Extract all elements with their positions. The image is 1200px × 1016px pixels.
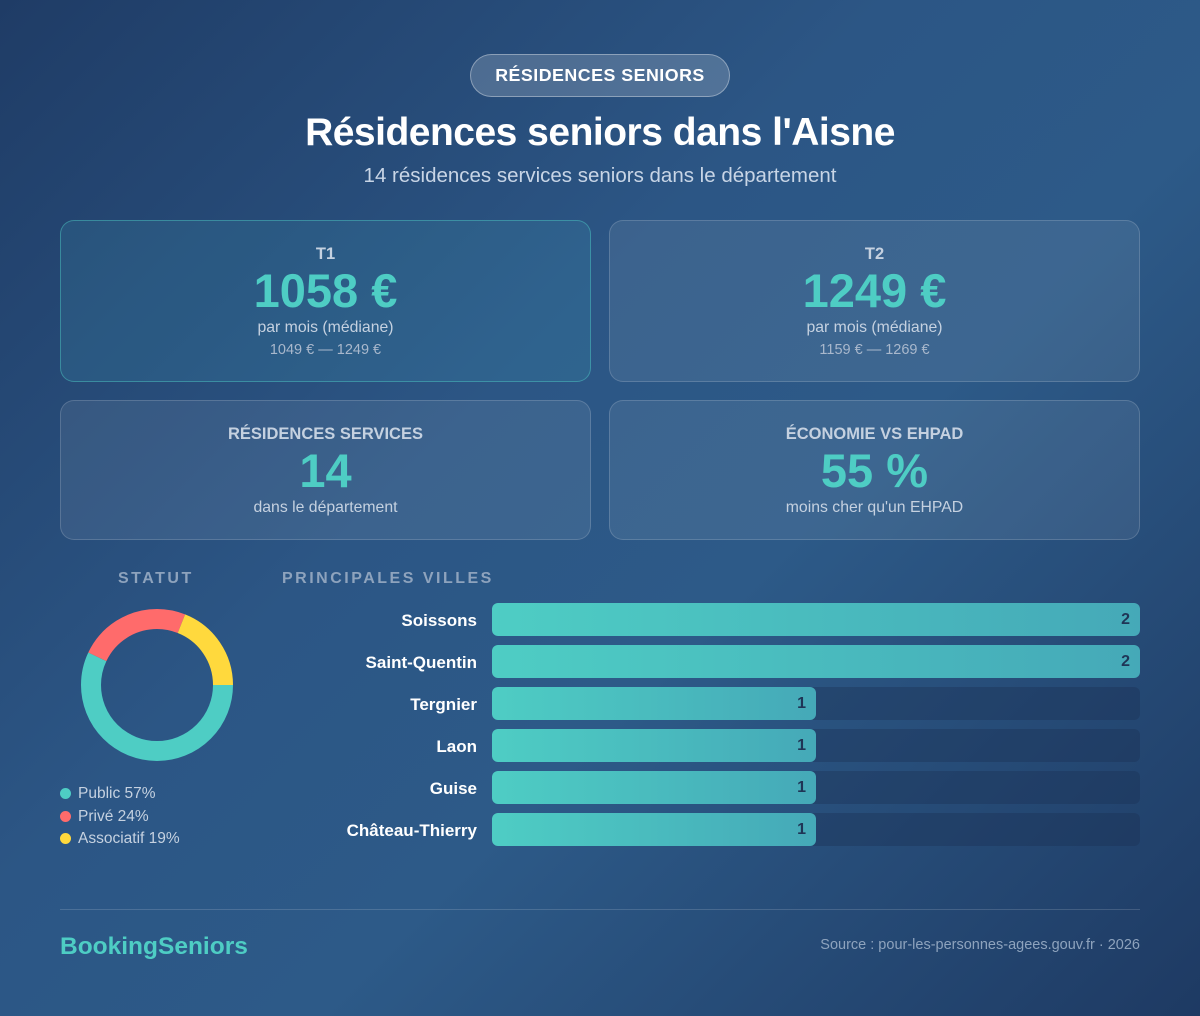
card: T2: 1249 €	[803, 264, 946, 317]
heading: statut: STATUT	[118, 570, 194, 587]
donut chart	[81, 609, 233, 761]
legend: Privé 24%	[78, 808, 149, 824]
bar: Laon	[436, 729, 1140, 762]
bar: Laon: 1	[797, 737, 806, 754]
card: economie: 55 %	[821, 444, 928, 497]
bar: Saint-Quentin: Saint-Quentin	[366, 653, 477, 672]
card: T2: par mois (médiane)	[806, 319, 943, 336]
card: T1: 1058 €	[254, 264, 397, 317]
bar: Soissons: Soissons	[401, 611, 477, 630]
badge	[470, 54, 730, 97]
card: T1: par mois (médiane)	[257, 319, 394, 336]
bar: Chateau-Thierry: Château-Thierry	[347, 821, 477, 840]
card: economie: moins cher qu'un EHPAD	[786, 499, 963, 516]
card: T1	[60, 220, 591, 382]
card: T1: 1049 € — 1249 €	[270, 342, 381, 358]
brand: BookingSeniors	[60, 933, 248, 960]
legend	[60, 785, 180, 847]
bar: Guise: Guise	[430, 779, 477, 798]
subtitle: 14 résidences services seniors dans le département	[364, 164, 836, 187]
bar: Chateau-Thierry	[347, 813, 1140, 846]
card: T2: T2	[865, 245, 884, 263]
card: economie	[609, 400, 1140, 540]
legend: Associatif 19%	[78, 830, 180, 847]
legend: Public 57%	[78, 785, 156, 802]
card: economie: ÉCONOMIE VS EHPAD	[786, 425, 963, 443]
bar: Tergnier: 1	[797, 695, 806, 712]
badge: RÉSIDENCES SENIORS	[495, 65, 705, 85]
bar: Laon: Laon	[436, 737, 477, 756]
bar: Guise: 1	[797, 779, 806, 796]
card: T1: T1	[316, 245, 335, 263]
bar: Saint-Quentin: 2	[1121, 653, 1130, 670]
bar: Saint-Quentin	[366, 645, 1140, 678]
bar: Chateau-Thierry: 1	[797, 821, 806, 838]
bar chart	[347, 603, 1140, 846]
card: residences: RÉSIDENCES SERVICES	[228, 425, 423, 443]
heading: villes: PRINCIPALES VILLES	[282, 570, 494, 587]
source: Source : pour-les-personnes-agees.gouv.fr · 2026	[820, 937, 1140, 953]
card: T2	[609, 220, 1140, 382]
bar: Soissons	[401, 603, 1140, 636]
card: residences: 14	[299, 444, 352, 497]
bar: Tergnier: Tergnier	[410, 695, 477, 714]
card: T2: 1159 € — 1269 €	[819, 342, 930, 358]
bar: Guise	[430, 771, 1140, 804]
title: Résidences seniors dans l'Aisne	[305, 111, 895, 154]
card: residences	[60, 400, 591, 540]
card: residences: dans le département	[253, 499, 398, 516]
bar: Soissons: 2	[1121, 611, 1130, 628]
bar: Tergnier	[410, 687, 1140, 720]
